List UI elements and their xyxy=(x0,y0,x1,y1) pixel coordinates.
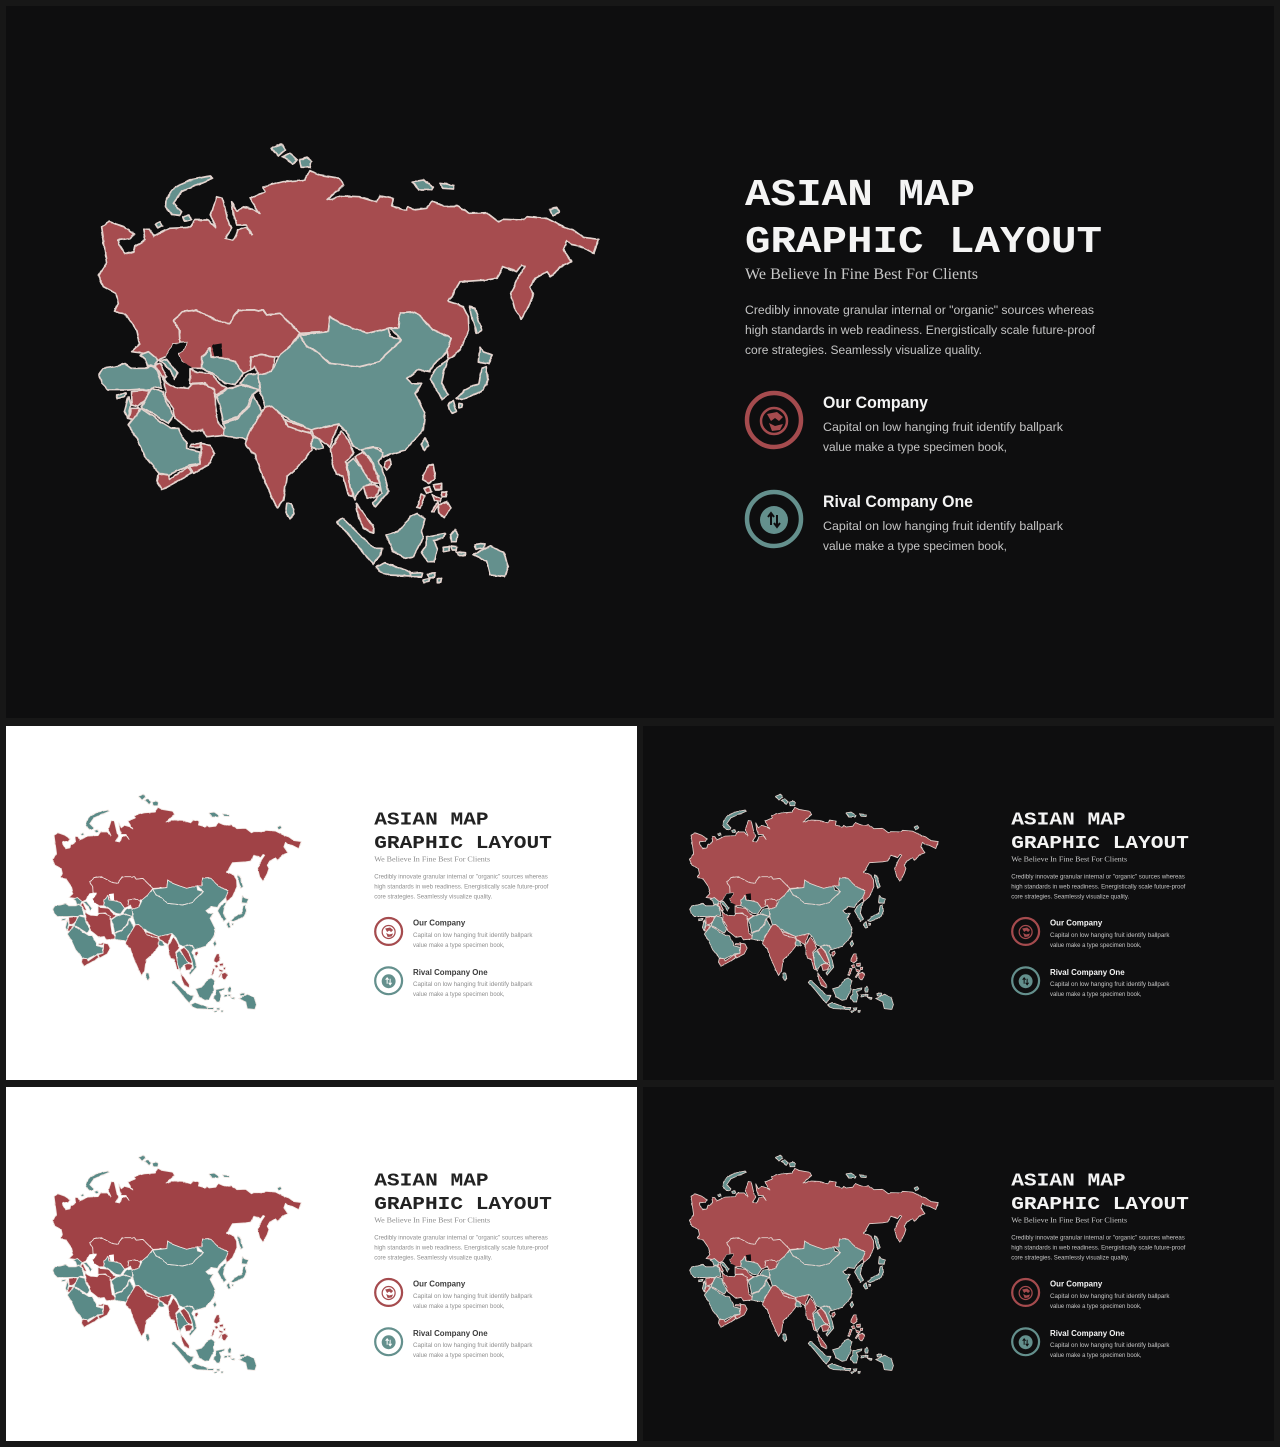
icon: globe xyxy=(747,393,801,447)
Aral Sea xyxy=(212,343,222,357)
panel: dark slide bottom right: high standards in web readiness. Energistically scale future-proof xyxy=(1011,1245,1186,1252)
legend: our company: Capital on low hanging fruit identify ballpark xyxy=(823,420,1064,434)
Novaya Zemlya and Arctic islets xyxy=(155,144,559,228)
Afghanistan xyxy=(217,385,260,422)
panel: white slide bottom left: Capital on low hanging fruit identify ballpark xyxy=(413,1293,533,1300)
Saudi Arabia xyxy=(128,408,200,475)
panel: dark slide bottom right: Credibly innovate granular internal or "organic" sources whereas xyxy=(1011,1235,1185,1242)
UAE and Oman xyxy=(190,443,214,473)
panel: white slide top left: Credibly innovate granular internal or "organic" sources whereas xyxy=(374,874,548,881)
panel: white slide top left: ASIAN MAP xyxy=(374,809,489,831)
Bangladesh xyxy=(312,437,323,450)
Pakistan xyxy=(223,395,265,442)
Taiwan and Sri Lanka xyxy=(286,438,428,518)
panel: dark slide top right: Rival Company One xyxy=(1050,968,1125,977)
panel: dark slide top right: core strategies. Seamlessly visualize quality. xyxy=(1011,894,1129,901)
title: ASIAN MAP xyxy=(745,174,975,217)
panel: dark slide top right: value make a type specimen book, xyxy=(1050,991,1142,998)
body paragraph: Credibly innovate granular internal or "organic" sources whereas xyxy=(745,303,1094,317)
panel: dark slide bottom right xyxy=(643,1087,1274,1441)
Caspian Sea xyxy=(166,343,192,388)
panel: main dark slide xyxy=(6,6,1274,718)
panel: white slide bottom left: Capital on low hanging fruit identify ballpark xyxy=(413,1342,533,1349)
Korea xyxy=(430,360,448,400)
panel: dark slide bottom right: Our Company xyxy=(1050,1280,1103,1289)
panel: white slide top left: GRAPHIC LAYOUT xyxy=(374,832,552,854)
panel: dark slide top right: We Believe In Fine Best For Clients xyxy=(1011,854,1127,863)
panel: white slide top left: core strategies. Seamlessly visualize quality. xyxy=(374,894,492,901)
panel: white slide bottom left: Our Company xyxy=(413,1280,466,1289)
China xyxy=(258,312,452,457)
panel: dark slide bottom right: core strategies. Seamlessly visualize quality. xyxy=(1011,1255,1129,1262)
panel: dark slide bottom right: Rival Company One xyxy=(1050,1329,1125,1338)
panel: white slide bottom left: We Believe In Fine Best For Clients xyxy=(374,1215,490,1224)
panel: dark slide bottom right: value make a type specimen book, xyxy=(1050,1303,1142,1310)
panel: white slide bottom left: core strategies. Seamlessly visualize quality. xyxy=(374,1255,492,1262)
Malaysia peninsula xyxy=(356,503,373,533)
Vietnam xyxy=(362,447,388,507)
Indonesia xyxy=(337,513,508,583)
Thailand xyxy=(347,458,372,500)
body paragraph: high standards in web readiness. Energistically scale future-proof xyxy=(745,323,1096,337)
panel: dark slide top right: value make a type specimen book, xyxy=(1050,942,1142,949)
panel: dark slide bottom right: value make a type specimen book, xyxy=(1050,1352,1142,1359)
panel: white slide top left: Capital on low hanging fruit identify ballpark xyxy=(413,932,533,939)
panel: white slide bottom left: value make a type specimen book, xyxy=(413,1303,505,1310)
Georgia and Azerbaijan xyxy=(140,352,178,379)
panel: white slide top left: Rival Company One xyxy=(413,968,488,977)
Iran xyxy=(163,377,225,437)
panel: white slide bottom left: GRAPHIC LAYOUT xyxy=(374,1193,552,1215)
India xyxy=(245,406,313,508)
Philippines xyxy=(417,465,451,517)
panel: white slide top left: value make a type specimen book, xyxy=(413,942,505,949)
Nepal and Bhutan region xyxy=(285,420,338,447)
panel: white slide bottom left: high standards in web readiness. Energistically scale future-proof xyxy=(374,1245,549,1252)
Hainan xyxy=(383,459,392,470)
subtitle: We Believe In Fine Best For Clients xyxy=(745,266,978,283)
title: GRAPHIC LAYOUT xyxy=(745,221,1102,264)
panel: dark slide bottom right: GRAPHIC LAYOUT xyxy=(1011,1193,1189,1215)
panel: white slide bottom left: Rival Company One xyxy=(413,1329,488,1338)
Yemen xyxy=(157,467,192,490)
Laos and Cambodia xyxy=(355,452,380,498)
legend: our company: Our Company xyxy=(823,394,929,412)
panel: dark slide top right: Capital on low hanging fruit identify ballpark xyxy=(1050,981,1170,988)
panel: dark slide bottom right: Capital on low hanging fruit identify ballpark xyxy=(1050,1293,1170,1300)
panel: dark slide bottom right: Capital on low hanging fruit identify ballpark xyxy=(1050,1342,1170,1349)
Lebanon and Israel xyxy=(124,397,131,418)
Myanmar xyxy=(331,431,354,496)
legend: our company: value make a type specimen book, xyxy=(823,440,1007,454)
panel: white slide top left: Capital on low hanging fruit identify ballpark xyxy=(413,981,533,988)
Iraq xyxy=(142,388,173,423)
legend: rival company one: Capital on low hanging fruit identify ballpark xyxy=(823,519,1064,533)
Turkey and Cyprus xyxy=(99,364,162,398)
Japan and Sakhalin xyxy=(448,307,493,413)
legend: rival company one xyxy=(823,493,1064,553)
title xyxy=(745,174,1102,264)
Arctic islands and Russia xyxy=(98,144,598,360)
panel: white slide top left xyxy=(6,726,637,1080)
Kazakhstan xyxy=(173,310,300,373)
Turkmenistan xyxy=(190,368,227,395)
panel: white slide top left: Our Company xyxy=(413,919,466,928)
legend: our company xyxy=(823,394,1064,454)
panel: dark slide top right: Credibly innovate granular internal or "organic" sources whereas xyxy=(1011,874,1185,881)
panel: dark slide top right: high standards in web readiness. Energistically scale future-proof xyxy=(1011,884,1186,891)
panel: white slide bottom left: ASIAN MAP xyxy=(374,1170,489,1192)
legend: rival company one: value make a type specimen book, xyxy=(823,539,1007,553)
panel: white slide bottom left: Credibly innovate granular internal or "organic" sources whereas xyxy=(374,1235,548,1242)
body paragraph: core strategies. Seamlessly visualize quality. xyxy=(745,343,982,357)
panel: white slide top left: high standards in web readiness. Energistically scale future-proof xyxy=(374,884,549,891)
Tajikistan xyxy=(240,373,260,390)
Mongolia xyxy=(300,317,402,367)
panel: white slide top left: We Believe In Fine Best For Clients xyxy=(374,854,490,863)
body paragraph xyxy=(745,303,1096,357)
panel: dark slide top right: Our Company xyxy=(1050,919,1103,928)
legend: rival company one: Rival Company One xyxy=(823,493,973,511)
map: Asia with red and teal countries xyxy=(98,144,598,583)
icon: exchange arrows xyxy=(747,492,801,546)
panel: white slide bottom left: value make a type specimen book, xyxy=(413,1352,505,1359)
Uzbekistan xyxy=(202,348,243,385)
panel: dark slide bottom right: We Believe In Fine Best For Clients xyxy=(1011,1215,1127,1224)
Kyrgyzstan xyxy=(250,355,275,375)
panel: dark slide top right: ASIAN MAP xyxy=(1011,809,1126,831)
panel: white slide top left: value make a type specimen book, xyxy=(413,991,505,998)
panel: dark slide top right: Capital on low hanging fruit identify ballpark xyxy=(1050,932,1170,939)
Armenia xyxy=(155,363,167,379)
panel: dark slide bottom right: ASIAN MAP xyxy=(1011,1170,1126,1192)
Syria and Jordan xyxy=(128,390,148,420)
panel: dark slide top right xyxy=(643,726,1274,1080)
panel: white slide bottom left xyxy=(6,1087,637,1441)
Russia xyxy=(98,171,598,360)
panel: dark slide top right: GRAPHIC LAYOUT xyxy=(1011,832,1189,854)
